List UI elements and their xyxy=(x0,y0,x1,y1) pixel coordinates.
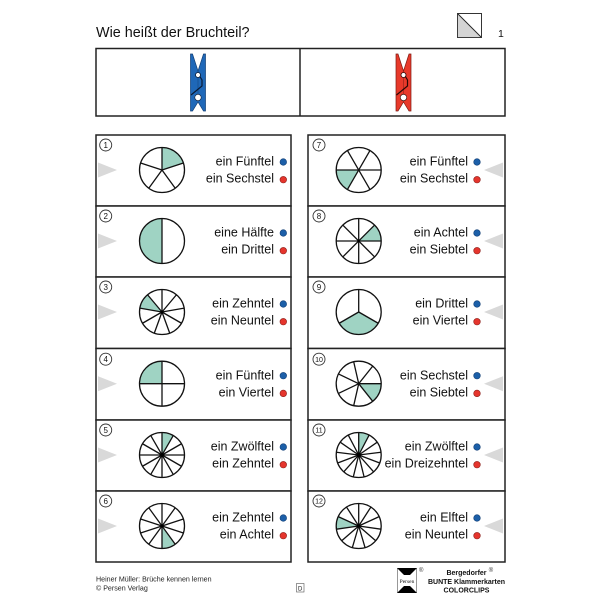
number 2: 2 xyxy=(103,212,108,221)
number 4 xyxy=(100,353,112,365)
card 7 xyxy=(308,135,505,206)
arrow xyxy=(98,162,117,178)
publisher logo: ® xyxy=(419,567,424,574)
answer red: ein Viertel xyxy=(219,385,274,399)
answer red: ein Sechstel xyxy=(400,172,468,186)
answer red: ein Neuntel xyxy=(405,528,468,542)
answer red: ein Viertel xyxy=(413,314,468,328)
number 9: 9 xyxy=(317,283,322,292)
series name: COLORCLIPS xyxy=(444,587,490,594)
arrow xyxy=(98,518,117,534)
answer red: ein Neuntel xyxy=(211,314,274,328)
answer red: ein Siebtel xyxy=(410,243,468,257)
footer credit xyxy=(96,576,212,592)
answer blue: ein Fünftel xyxy=(410,155,468,169)
pie: six slices xyxy=(336,148,381,192)
pie: eleven slices xyxy=(336,504,381,548)
card 5 xyxy=(96,420,291,491)
icon: blue clothespin xyxy=(190,54,206,111)
answer red: ein Drittel xyxy=(221,243,274,257)
arrow xyxy=(484,518,503,534)
icon: red clothespin xyxy=(396,54,411,111)
answer red: ein Sechstel xyxy=(206,172,274,186)
answer blue: eine Hälfte xyxy=(214,226,274,240)
arrow xyxy=(484,448,503,462)
arrow xyxy=(484,376,503,391)
pie: five slices xyxy=(140,148,184,192)
card 9 xyxy=(308,277,505,348)
card 6 xyxy=(96,491,291,562)
number 10: 10 xyxy=(315,357,323,364)
publisher logo: Persen xyxy=(400,579,415,585)
number 9 xyxy=(313,281,325,293)
number 12: 12 xyxy=(315,499,323,506)
series name: ® xyxy=(489,567,494,574)
number 11: 11 xyxy=(315,428,323,435)
pie: ten slices xyxy=(140,504,184,548)
card 3 xyxy=(96,277,291,348)
icon: card corner square xyxy=(458,14,482,38)
answer blue: ein Drittel xyxy=(415,297,468,311)
number 4: 4 xyxy=(103,355,108,364)
number 6: 6 xyxy=(103,497,108,506)
footer code box: D xyxy=(298,586,303,592)
answer red: ein Achtel xyxy=(220,528,274,542)
publisher logo xyxy=(397,567,424,593)
number 5 xyxy=(100,424,112,436)
pie: eight slices xyxy=(336,218,381,264)
pie: seven slices xyxy=(336,361,381,406)
answer red: ein Dreizehntel xyxy=(385,457,468,471)
pie: three slices xyxy=(336,290,381,335)
footer credit: © Persen Verlag xyxy=(96,584,148,592)
card 12 xyxy=(308,491,505,562)
series name xyxy=(428,567,505,594)
answer blue: ein Achtel xyxy=(414,226,468,240)
card 1 xyxy=(96,135,291,206)
arrow xyxy=(484,304,503,320)
answer blue: ein Zwölftel xyxy=(211,440,274,454)
card 8 xyxy=(308,206,505,277)
arrow xyxy=(484,234,503,248)
pie: half xyxy=(140,218,184,264)
page number: 1 xyxy=(498,28,504,40)
pie: nine slices xyxy=(140,290,184,334)
number 3: 3 xyxy=(103,283,108,292)
number 6 xyxy=(100,495,112,507)
answer blue: ein Elftel xyxy=(420,511,468,525)
answer blue: ein Zehntel xyxy=(212,297,274,311)
series name: Bergedorfer xyxy=(446,570,487,577)
number 7 xyxy=(313,139,325,151)
title: Wie heißt der Bruchteil? xyxy=(96,25,250,41)
number 10 xyxy=(313,353,325,365)
card 4 xyxy=(96,348,291,420)
answer blue: ein Fünftel xyxy=(216,368,274,382)
number 8 xyxy=(313,210,325,222)
answer blue: ein Sechstel xyxy=(400,368,468,382)
number 11 xyxy=(313,424,325,436)
answer blue: ein Fünftel xyxy=(216,155,274,169)
number 7: 7 xyxy=(317,141,322,150)
footer code box xyxy=(296,584,304,592)
pie: four slices xyxy=(140,361,184,406)
answer red: ein Zehntel xyxy=(212,457,274,471)
number 5: 5 xyxy=(103,426,108,435)
number 1: 1 xyxy=(103,141,108,150)
card 10 xyxy=(308,348,505,420)
arrow xyxy=(98,448,117,462)
arrow xyxy=(98,376,117,391)
answer blue: ein Zehntel xyxy=(212,511,274,525)
number 2 xyxy=(100,210,112,222)
number 1 xyxy=(100,139,112,151)
number 3 xyxy=(100,281,112,293)
arrow xyxy=(98,304,117,320)
card 11 xyxy=(308,420,505,491)
footer credit: Heiner Müller: Brüche kennen lernen xyxy=(96,576,212,584)
pie: thirteen slices xyxy=(336,432,381,478)
series name: BUNTE Klammerkarten xyxy=(428,579,505,586)
answer red: ein Siebtel xyxy=(410,385,468,399)
answer blue: ein Zwölftel xyxy=(405,440,468,454)
panel: clothespin legend xyxy=(96,48,505,116)
arrow xyxy=(484,162,503,178)
pie: twelve slices xyxy=(140,432,184,478)
card 2 xyxy=(96,206,291,277)
arrow xyxy=(98,234,117,248)
number 8: 8 xyxy=(317,212,322,221)
number 12 xyxy=(313,495,325,507)
